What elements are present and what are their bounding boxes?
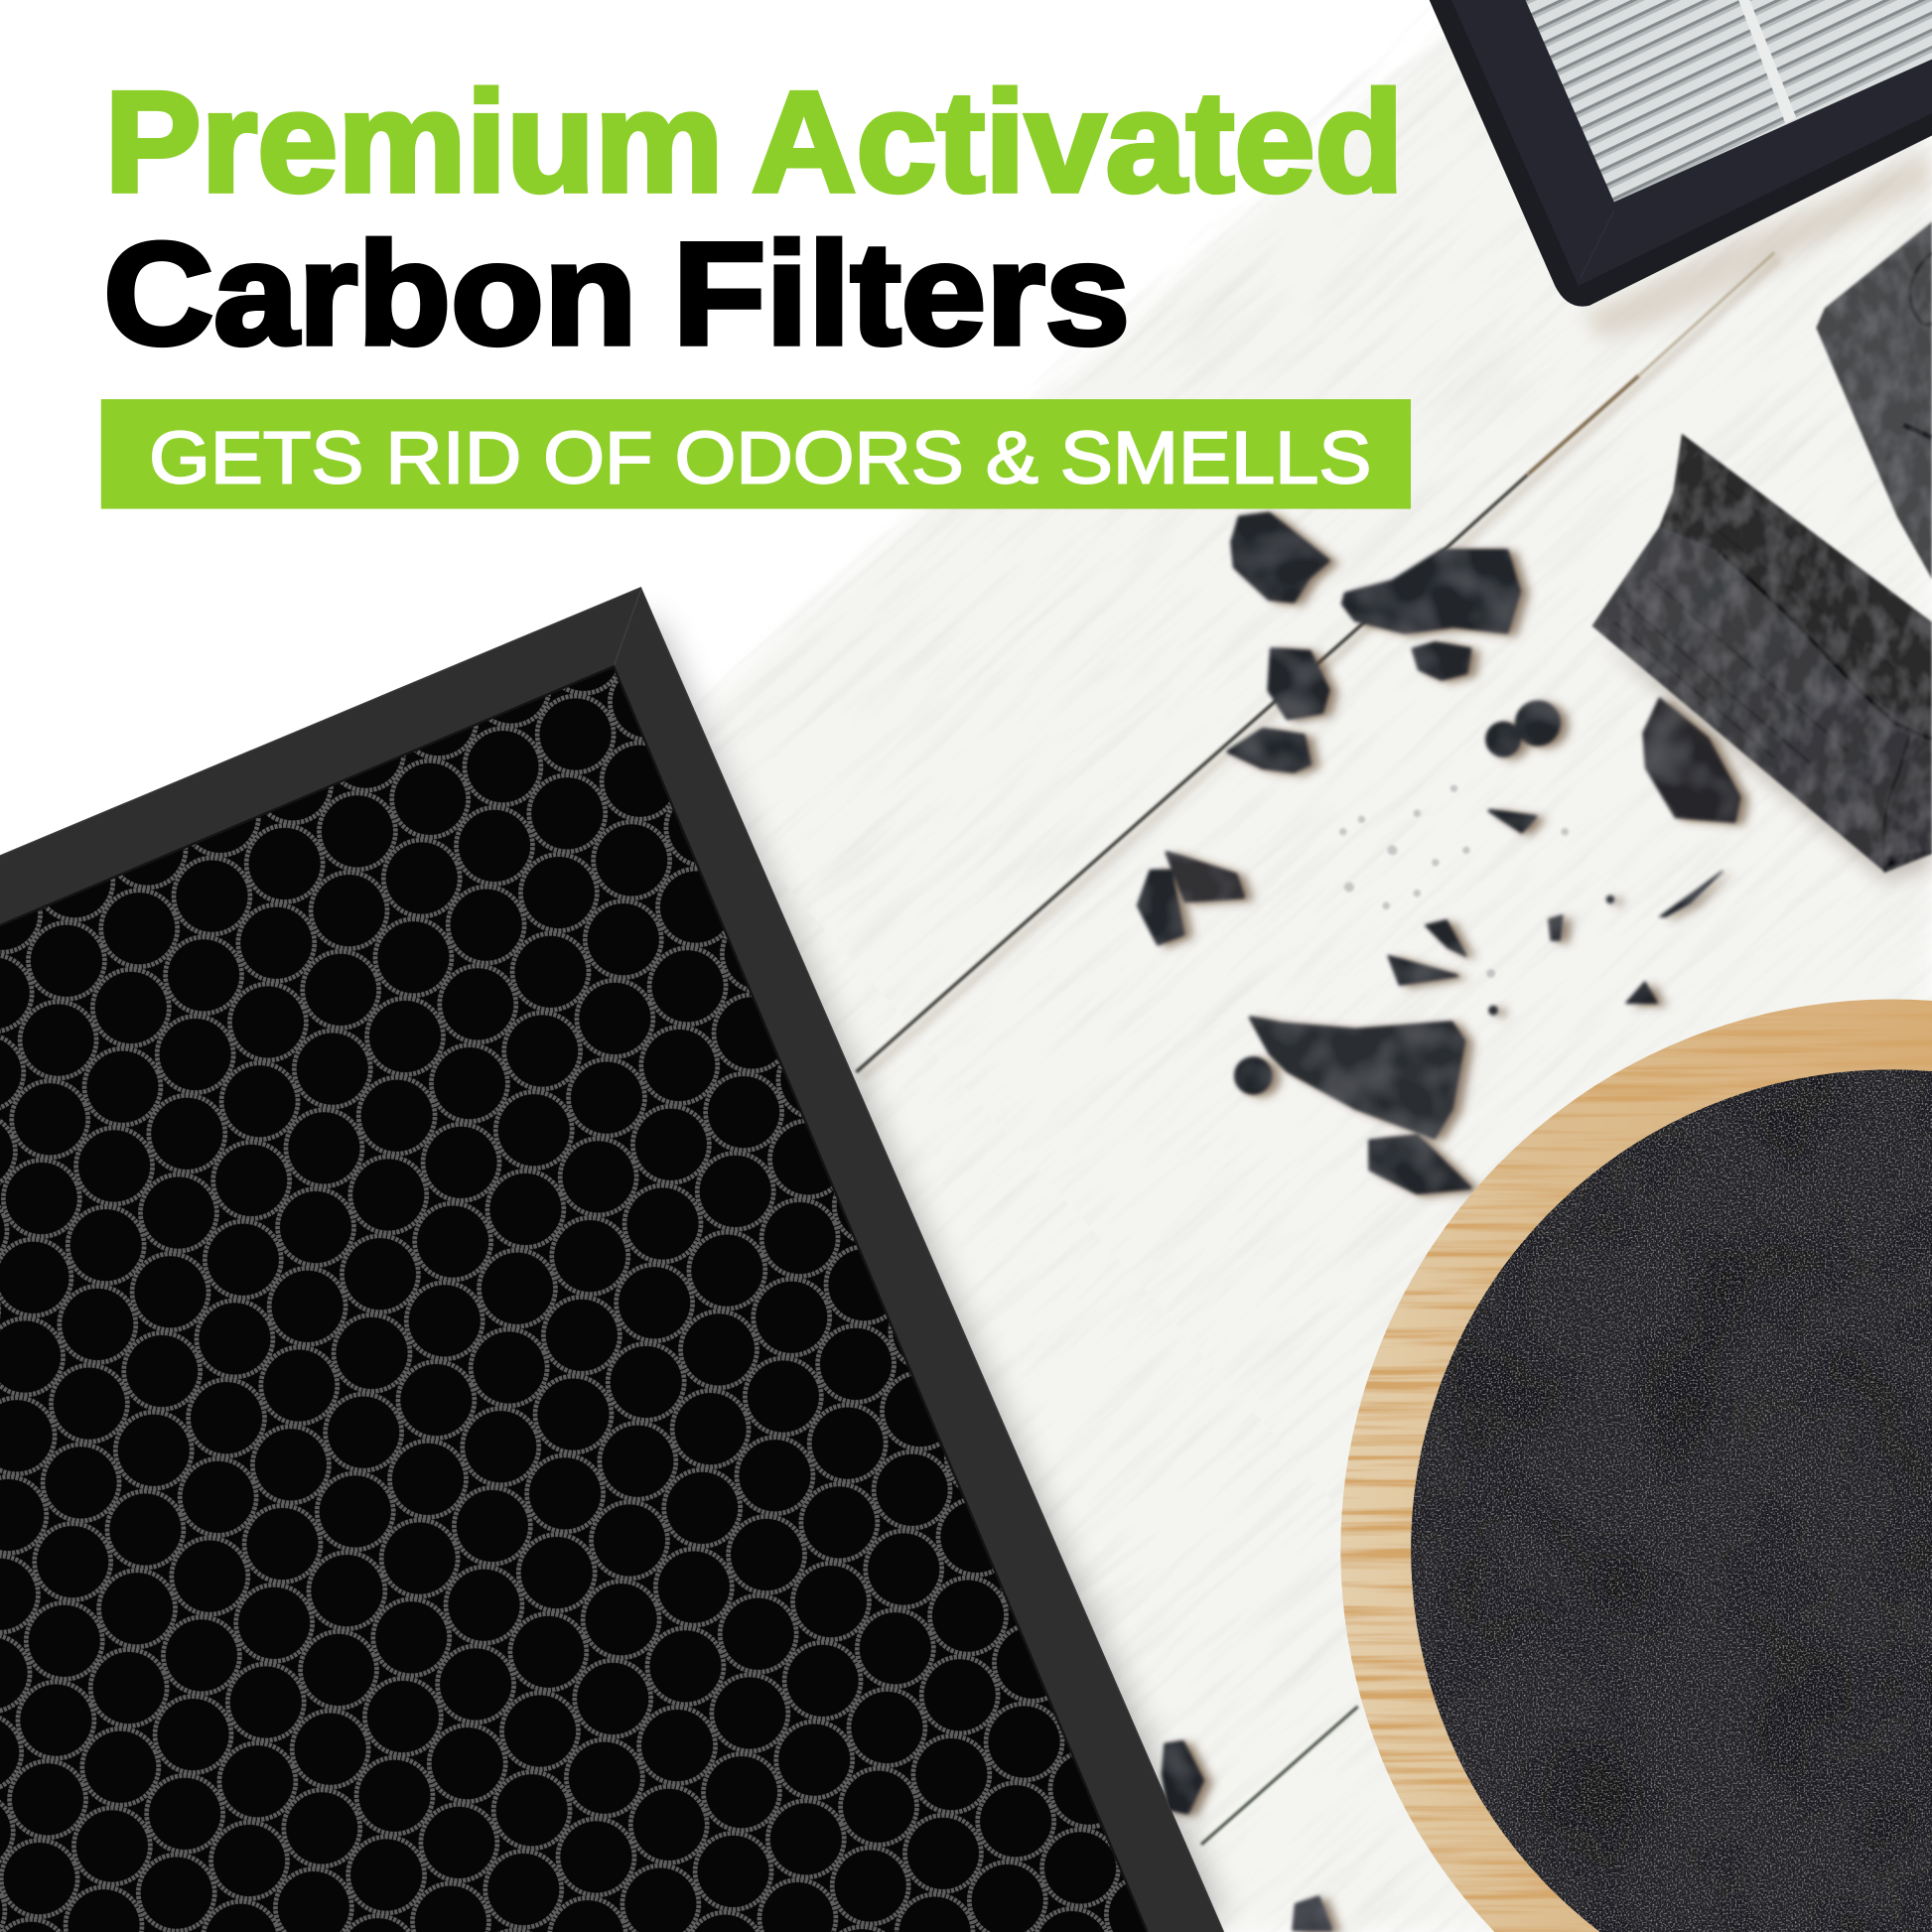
large charcoal log (1591, 434, 1932, 881)
frame (0, 588, 1223, 1932)
frame shadow (617, 617, 1222, 1922)
small HEPA filter, top right (1430, 0, 1932, 339)
scattered charcoal chunks (1139, 514, 1723, 1930)
wooden rim (1340, 999, 1932, 1932)
subtitle banner: GETS RID OF ODORS & SMELLS (149, 416, 1371, 498)
title line one: Premium (104, 62, 724, 221)
carbon filter (0, 588, 1223, 1932)
title line two: Carbon (103, 212, 637, 375)
charcoal dust (1339, 785, 1569, 978)
log streaks (1614, 486, 1922, 763)
title line two: Filters (673, 212, 1130, 375)
honeycomb mesh (0, 666, 1147, 1932)
title line two (103, 212, 1130, 375)
HEPA frame (1430, 0, 1932, 307)
charcoal powder (1411, 1069, 1932, 1932)
HEPA pleats (1525, 0, 1932, 203)
title line one: Activated (752, 62, 1404, 221)
wooden bowl with charcoal powder (1340, 999, 1932, 1932)
charcoal chunk under log (1644, 699, 1739, 822)
charcoal log, upper right (1816, 221, 1932, 579)
crack (1719, 551, 1932, 740)
title line one (104, 62, 1404, 221)
white wood planks (708, 36, 1932, 1932)
subtitle banner (101, 399, 1411, 509)
dark top facet (1660, 434, 1932, 740)
